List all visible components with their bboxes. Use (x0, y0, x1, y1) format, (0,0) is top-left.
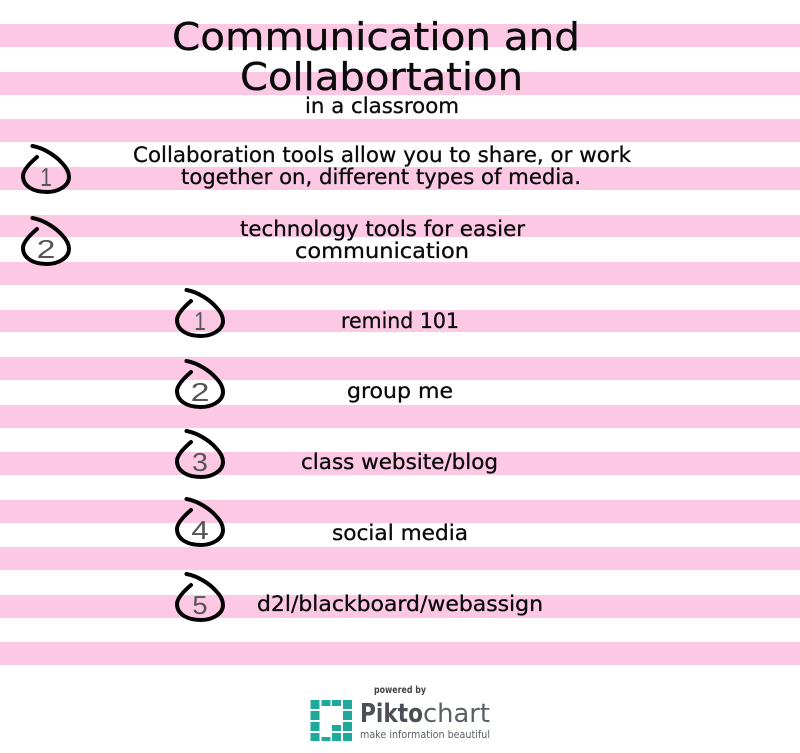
list badge 2 (177, 361, 223, 407)
list item: group me: group me (347, 379, 453, 403)
footer: Piktochart logo: make information beautiful (360, 728, 490, 741)
title: Communication and (172, 15, 580, 59)
list badge 1: 1 (194, 306, 206, 336)
text block: collaboration tools: Collaboration tools allow you to share, or work (133, 143, 632, 167)
list badge 3 (177, 431, 223, 477)
subtitle: in a classroom (305, 94, 459, 118)
numbered badge 2: 2 (37, 234, 55, 264)
list badge 2: 2 (191, 377, 209, 407)
text block: collaboration tools: together on, different types of media. (181, 165, 581, 189)
list item: class website/blog: class website/blog (301, 450, 498, 474)
footer: Piktochart logo: Pikto (360, 699, 423, 729)
footer: Piktochart logo (310, 685, 490, 741)
text block: technology tools (240, 217, 525, 263)
numbered badge 2 (23, 218, 69, 264)
list badge 5: 5 (192, 590, 208, 620)
footer: Piktochart logo: powered by (374, 685, 426, 696)
list item: d2l/blackboard/webassign: d2l/blackboard/webassign (257, 592, 543, 616)
icon: Piktochart mark (310, 700, 352, 741)
list item: social media: social media (332, 521, 468, 545)
text block: technology tools: communication (295, 239, 469, 263)
list badge 4 (177, 499, 223, 545)
title (172, 15, 580, 99)
footer: Piktochart logo: chart (423, 699, 490, 729)
numbered badge 1: 1 (40, 162, 52, 192)
text block: collaboration tools (133, 143, 632, 189)
list badge 5 (177, 574, 223, 620)
title: Collabortation (240, 55, 523, 99)
list badge 1 (177, 290, 223, 336)
text block: technology tools: technology tools for easier (240, 217, 525, 241)
list badge 4: 4 (191, 515, 209, 545)
numbered badge 1 (23, 146, 69, 192)
list item: remind 101: remind 101 (341, 309, 459, 333)
list badge 3: 3 (192, 447, 208, 477)
